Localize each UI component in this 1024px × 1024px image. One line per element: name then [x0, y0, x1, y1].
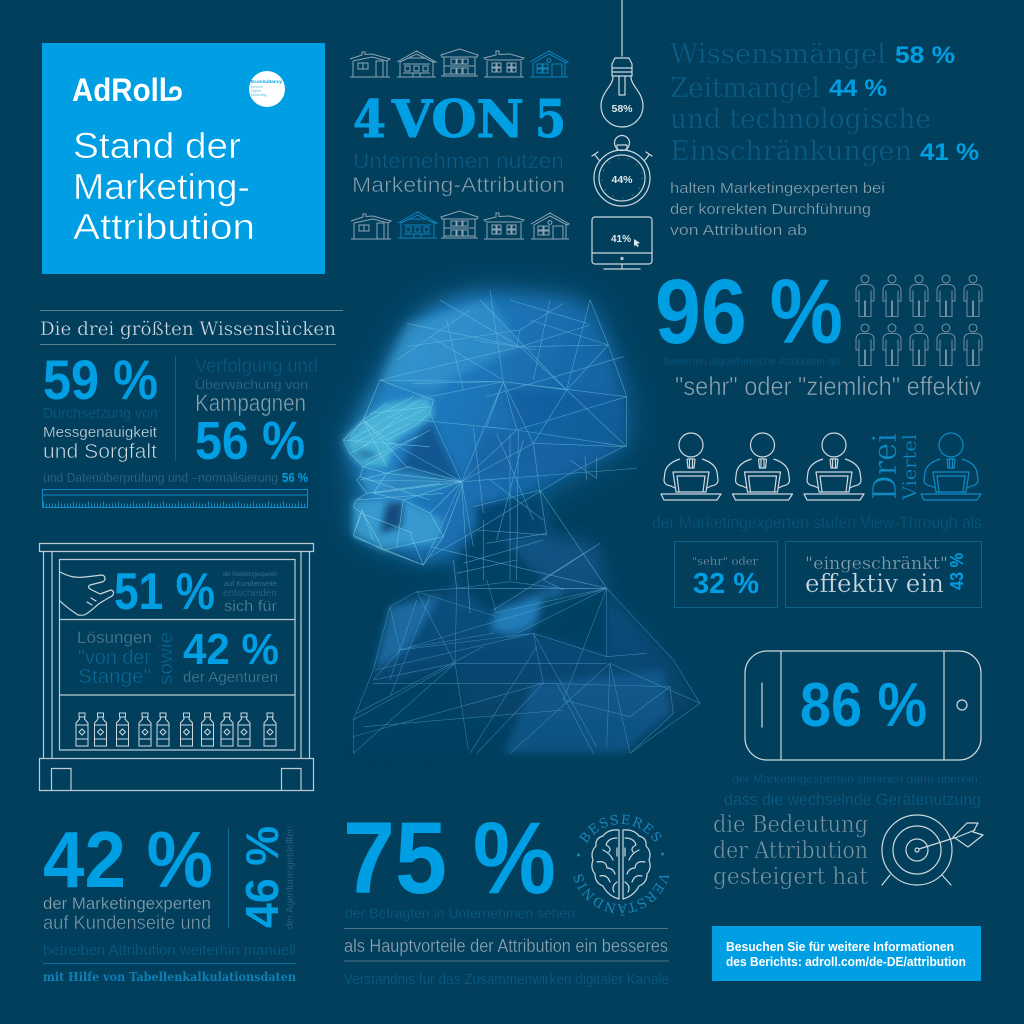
text: Hauptvorteile: als Hauptvorteile der Attribution ein besseres: [344, 936, 668, 956]
title: Marketing-: [73, 166, 250, 207]
box: 32 %: 32 %: [693, 568, 759, 600]
panel: 42 %: [43, 815, 296, 984]
text: der Marketingexperten: [43, 894, 211, 913]
box: 43 %: [786, 542, 982, 608]
box: 43 %: 43 %: [947, 553, 967, 590]
callout: link box: [712, 926, 981, 981]
panel: Drei Viertel: [652, 433, 982, 608]
rotated label: sowie: sowie: [156, 632, 177, 685]
callout: link box: des Berichts: adroll.com/de-DE/attribution: [726, 954, 966, 969]
icon: stopwatch: 44%: [611, 174, 633, 186]
badge: Econsultancy: Marketing: [251, 93, 266, 97]
panel: Wissensmängel: [670, 39, 979, 239]
logo: AdRoll: AdRoll: [72, 72, 167, 108]
badge: Econsultancy: Econsultancy: [251, 79, 283, 84]
text: Durchsetzung: und Sorgfalt: [43, 441, 157, 463]
callout: link box: Besuchen Sie für weitere Informationen: [726, 939, 954, 954]
facets: [350, 300, 670, 757]
title: [73, 125, 255, 247]
stat: 42 %: 42 %: [43, 815, 213, 904]
text: Bedeutung: [713, 812, 869, 890]
text: entscheiden: [223, 572, 277, 615]
text: auf Kundenseite und: [43, 913, 211, 934]
heading: Die drei größten Wissenslücken: [40, 318, 336, 340]
caption: der Marketingexperten stufen View-Through als: [652, 513, 982, 532]
heading lines: Einschränkungen: [670, 136, 912, 167]
icon: stopwatch: [592, 136, 652, 206]
text: Bedeutung: gesteigert hat: [713, 864, 869, 890]
text: entscheiden: der Marketingexperten: [223, 572, 277, 578]
rotated label: Viertel: Viertel: [899, 434, 921, 501]
bright face: [343, 397, 433, 467]
icon: monitor: 41%: [611, 234, 631, 245]
percentages: 58 %: [895, 42, 955, 69]
panel: 96 %: [655, 261, 982, 401]
text: Lösungen von der Stange: Stange": [78, 666, 151, 688]
icon grid: people: [856, 275, 982, 366]
caption: bewerten algorithmische Attribution als: [664, 356, 841, 368]
icons: bottles: [76, 713, 276, 746]
shelf frame: [40, 544, 314, 790]
figure: polygon mesh head: [343, 290, 700, 757]
percentages: [829, 42, 979, 166]
text: Durchsetzung: [43, 405, 158, 463]
stat: 56 %: 56 %: [195, 411, 305, 471]
stat: 96 %: 96 %: [655, 261, 843, 363]
heading lines: Zeitmangel: [670, 73, 820, 104]
text: Lösungen von der Stange: "von der: [78, 647, 151, 669]
caption: "sehr" oder "ziemlich" effektiv: [675, 371, 981, 401]
icon row: houses top: [350, 49, 568, 77]
panel: title box: [42, 43, 325, 274]
box: 43 %: effektiv ein: [805, 569, 944, 598]
rule: [43, 962, 296, 964]
title: Attribution: [73, 206, 255, 247]
text: Durchsetzung: Messgenauigkeit: [43, 424, 158, 441]
mesh lines: shoulders: [353, 580, 700, 753]
icon: smartphone: [745, 651, 981, 760]
rotated caption: der Agenturangestellten: [284, 826, 296, 929]
text: Verfolgung: Verfolgung und: [195, 356, 318, 377]
caption: Unternehmen nutzen: [353, 150, 564, 173]
box: 32 %: [674, 542, 778, 608]
badge: Econsultancy: Artwork: [251, 85, 263, 89]
text: Verfolgung: [195, 356, 318, 417]
heading lines: und technologische: [670, 104, 931, 135]
percentages: 41 %: [920, 139, 979, 166]
heading lines: [670, 39, 931, 167]
divider: [228, 828, 230, 928]
badge: Econsultancy: Digital: [251, 89, 261, 93]
text: Durchsetzung: Durchsetzung von: [43, 405, 158, 422]
stat: 4 von 5: [353, 90, 566, 150]
panel: 86 %: [713, 651, 983, 890]
caption: Marketing-Attribution: [352, 174, 565, 197]
body text: halten Marketingexperten bei: [670, 181, 885, 197]
heading: [40, 310, 343, 344]
text: Verfolgung: Überwachung von: [195, 377, 308, 392]
icon: brain with circular text: BESSERES: [579, 814, 662, 844]
icons: laptop users: [661, 433, 981, 500]
caption: dass die wechselnde Gerätenutzung: [724, 790, 981, 809]
icon: brain with circular text: [574, 814, 670, 916]
text: Lösungen von der Stange: Lösungen: [77, 628, 152, 647]
text: Datenüberprüfung: 56 %: [282, 471, 308, 485]
body text: von Attribution ab: [670, 223, 807, 239]
rotated stat: 46 %: 46 %: [236, 826, 288, 928]
stat: 86 %: 86 %: [800, 671, 927, 740]
stat: 59 %: 59 %: [43, 348, 158, 411]
text: Verständnis: Verständnis für das Zusammenwirken digitaler Kanäle: [344, 971, 669, 988]
stat: 4 von 5: 5: [535, 90, 566, 150]
ruler gauge: [42, 490, 308, 508]
text: Datenüberprüfung: und Datenüberprüfung und –normalisierung: [43, 471, 278, 485]
glow and mesh: [343, 290, 700, 757]
text: Bedeutung: die Bedeutung: [713, 812, 868, 838]
text: manuell: betreiben Attribution weiterhin manuell: [43, 942, 296, 959]
heading lines: Wissensmängel: [670, 39, 886, 70]
rule: [344, 928, 669, 961]
icon: light bulb: [601, 0, 643, 127]
text: entscheiden: sich für: [224, 598, 277, 615]
text: Bedeutung: der Attribution: [713, 838, 868, 864]
body text: der korrekten Durchführung: [670, 202, 871, 218]
caption: [724, 772, 981, 809]
text: Verfolgung: Kampagnen: [195, 390, 306, 417]
rotated label: Drei: Drei: [865, 433, 904, 500]
icon: hand: [60, 572, 114, 615]
box: 32 %: "sehr" oder: [692, 554, 758, 568]
box: 43 %: "eingeschränkt": [805, 554, 948, 574]
stat: 51 %: 51 %: [114, 563, 215, 621]
panel: 4 von 5: [350, 49, 569, 239]
text: Lösungen von der Stange: [77, 628, 152, 688]
body text: [670, 181, 885, 239]
percentages: 44 %: [829, 75, 887, 102]
title: Stand der: [73, 125, 241, 166]
text: der Agenturen: der Agenturen: [183, 669, 278, 686]
stat: 75 %: 75 %: [343, 801, 556, 915]
icon: brain with circular text: VERSTÄNDNIS: [574, 874, 670, 916]
panel: 75 %: [343, 801, 670, 988]
mesh lines: face: [343, 380, 463, 565]
icon: light bulb: 58%: [611, 103, 633, 115]
mesh lines: head: [363, 290, 637, 613]
caption: der Marketingexperten stimmen darin überein,: [732, 772, 981, 786]
text: entscheiden: entscheiden: [223, 588, 277, 599]
stat: 42 %: 42 %: [183, 625, 279, 674]
icon: target with arrow: [882, 815, 983, 885]
badge: Econsultancy: [249, 71, 285, 107]
icon: monitor: [592, 217, 652, 269]
caption: der Befragten in Unternehmen sehen: [345, 905, 575, 921]
stat: 4 von 5: VON: [391, 90, 524, 150]
text: Tabellenkalkulation: mit Hilfe von Tabellenkalkulationsdaten: [43, 969, 296, 984]
text: [43, 894, 211, 934]
icon row: houses bottom: [351, 211, 569, 239]
stat: 4 von 5: 4: [353, 90, 386, 150]
divider: [174, 356, 176, 461]
text: entscheiden: auf Kundenseite: [224, 581, 277, 588]
caption: [352, 150, 565, 197]
panel: shelf: [40, 544, 314, 790]
panel: 59 % knowledge gaps: [40, 310, 343, 508]
